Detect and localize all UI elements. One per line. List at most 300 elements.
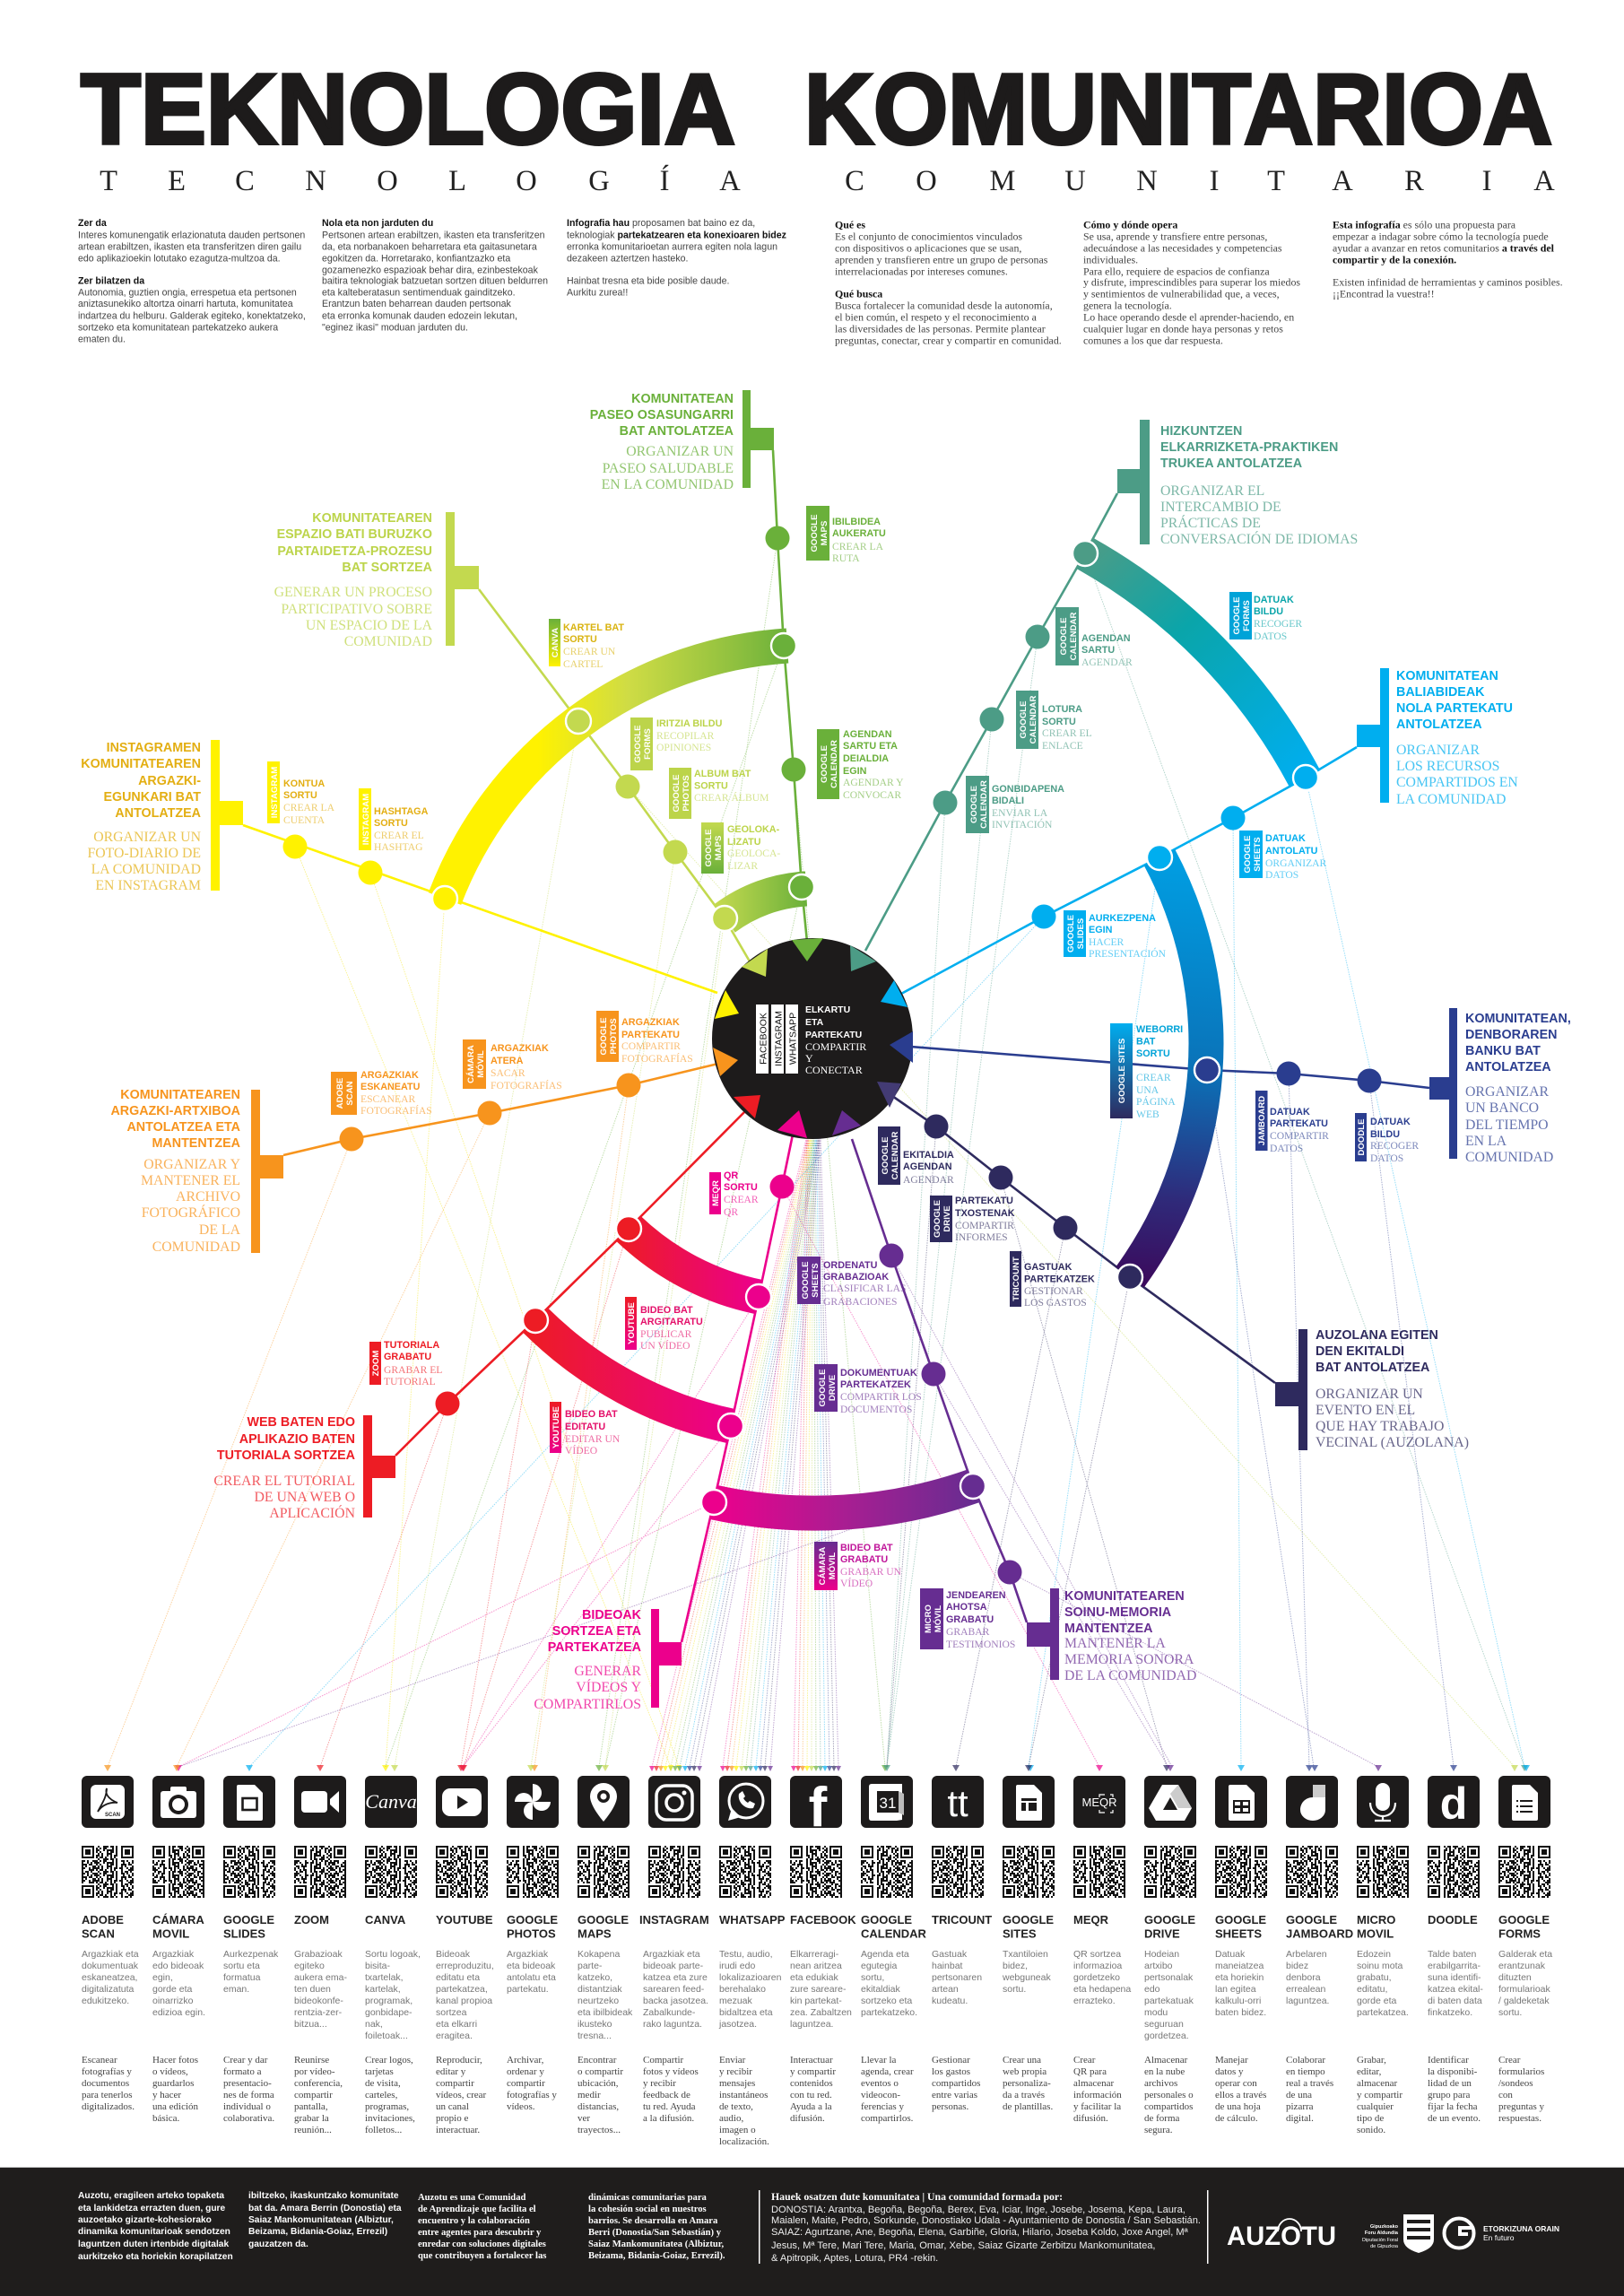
tool: Doodle: di baten data xyxy=(1428,1996,1482,2006)
node label: QR sortu: SORTU xyxy=(724,1182,758,1193)
tool: WhatsApp: berehalako xyxy=(719,1984,766,1995)
intro text: Nola eta non jarduten du: gozamenezko espazioak behar dira, ezinbestekoak xyxy=(322,265,539,276)
intro text: Qué es / Qué busca: preguntas, conectar, crear y compartir en comunidad. xyxy=(835,334,1062,346)
tool: Adobe Scan: dokumentuak xyxy=(82,1961,139,1971)
intro text: Qué es / Qué busca: Qué busca xyxy=(835,287,882,300)
node label: Bideo bat argitaratu xyxy=(625,1297,703,1352)
node label: Datuak partekatu xyxy=(1255,1091,1329,1154)
footer text: Spanish description: de Aprendizaje que facilita el xyxy=(418,2205,536,2214)
node label: Album bat sortu: SORTU xyxy=(694,780,728,791)
tool: WhatsApp: WHATSAPP xyxy=(719,1913,786,1926)
tool: Micro Movil: MICRO xyxy=(1357,1913,1395,1926)
tool: Google Maps: ubicación, xyxy=(578,2078,619,2089)
branch: dark indigo, auzolan event: DEN EKITALDI xyxy=(1316,1344,1404,1359)
node label: Agendan sartu eta deialdia egin: CONVOCAR xyxy=(843,789,901,801)
node label: Partekatu txostenak: DRIVE xyxy=(942,1205,952,1232)
intro text: Nola eta non jarduten du: Nola eta non jarduten du xyxy=(322,218,433,229)
branch: green, healthy walk: ORGANIZAR UN xyxy=(626,444,734,459)
tool: Micro Movil: Edozein xyxy=(1357,1949,1391,1960)
node label: Ordenatu grabazioak xyxy=(797,1257,906,1308)
node label: Bideo bat editatu xyxy=(550,1402,621,1457)
subtitle: TECNOLOGÍACOMUNITARIA xyxy=(100,165,1555,197)
node label: Jendearen ahotsa grabatu: MICRO xyxy=(924,1604,934,1633)
branch: yellow, Instagram photo diary: FOTO-DIARIO DE xyxy=(87,846,201,861)
tool: Google Forms: GOOGLE xyxy=(1498,1913,1550,1926)
branch: yellow, Instagram photo diary: ANTOLATZEA xyxy=(115,806,201,821)
branch: red, web tutorial: WEB BATEN EDO xyxy=(248,1415,355,1430)
logo: Etorkizuna Orain: ETORKIZUNA ORAIN xyxy=(1483,2224,1559,2233)
node label: Dokumentuak partekatzek: GOOGLE xyxy=(818,1369,828,1407)
branch: dark indigo, auzolan event: VECINAL (AUZOLANA) xyxy=(1316,1435,1469,1450)
tool: Google Sites xyxy=(1002,1776,1055,2112)
branch: lime, participatory process: COMUNIDAD xyxy=(344,634,432,649)
tool: Cámara Movil: edo bideoak xyxy=(152,1961,204,1971)
branch: red, web tutorial: CREAR EL TUTORIAL xyxy=(213,1474,355,1489)
node label: Datuak bildu: DATUAK xyxy=(1254,595,1294,605)
arc: lime to green small xyxy=(725,889,806,918)
intro text: Cómo y dónde opera xyxy=(1083,219,1300,346)
node label: Bideo bat grabatu: CÁMARA xyxy=(817,1547,828,1585)
footer text: Spanish description: Auzotu es una Comunidad xyxy=(418,2193,525,2203)
tool: Doodle: Identificar xyxy=(1428,2055,1469,2066)
central hub: ETA xyxy=(805,1017,824,1028)
node label: Album bat sortu: GOOGLE xyxy=(672,774,682,813)
tool: Tricount xyxy=(932,1776,992,2112)
tool: Canva: CANVA xyxy=(365,1913,406,1926)
tool: Adobe Scan xyxy=(82,1776,139,2112)
node label: Argazkiak atera xyxy=(463,1039,562,1091)
intro text: Esta infografía: empezar a indagar sobre cómo la tecnología puede xyxy=(1333,230,1549,242)
intro text: Nola eta non jarduten du: egokitzen da. Horretarako, konfiantzazko eta xyxy=(322,253,510,264)
node label: Datuak bildu: RECOGER xyxy=(1254,618,1302,630)
branch: blue, shared resources: ANTOLATZEA xyxy=(1396,718,1482,732)
tool: Zoom: bitzua... xyxy=(294,2019,327,2030)
tool: Canva: invitaciones, xyxy=(365,2113,415,2124)
tool: Google Maps xyxy=(578,1776,633,2135)
tool: Cámara Movil: MOVIL xyxy=(152,1927,189,1941)
node label: Datuak partekatu: COMPARTIR xyxy=(1270,1130,1329,1142)
branch: blue, shared resources: COMPARTIDOS EN xyxy=(1396,775,1518,790)
intro text: Esta infografía: ¡¡Encontrad la vuestra!! xyxy=(1333,287,1435,300)
footer text: community members: DONOSTIA: Arantxa, Begoña, Begoña, Berex, Eva, Iciar, Inge, Josebe, Josema, Kepa, Laura, xyxy=(771,2205,1185,2215)
branch: lime, participatory process: KOMUNITATEAREN xyxy=(312,511,432,526)
intro text: Zer da / Zer bilatzen da: ematen du. xyxy=(78,334,126,344)
tool: Google Calendar: 31 xyxy=(880,1795,896,1812)
intro text: Zer da / Zer bilatzen da: Zer bilatzen da xyxy=(78,276,144,287)
node label: Lotura sortu: CALENDAR xyxy=(1029,696,1038,744)
node label: Argazkiak atera: CÁMARA xyxy=(465,1045,476,1083)
branch: red, web tutorial: TUTORIALA SORTZEA xyxy=(217,1448,355,1463)
node label: Ordenatu grabazioak: ORDENATU xyxy=(823,1260,878,1271)
tool: Doodle: grupo para xyxy=(1428,2090,1470,2100)
node label: Ekitaldia agendan xyxy=(878,1126,954,1186)
tool: MEQR: información xyxy=(1073,2090,1122,2100)
branch: orange, photo archive: ARCHIVO xyxy=(176,1189,240,1205)
intro text: Nola eta non jarduten du: eta kalteberatasun sentimenduak gainditzeko. xyxy=(322,287,516,298)
tool: Adobe Scan: eskaneatzea, xyxy=(82,1972,137,1983)
tool: Canva: programak, xyxy=(365,1996,413,2006)
tool: Google Sheets: ellos a través xyxy=(1215,2090,1266,2100)
tool: Canva: foiletoak... xyxy=(365,2031,408,2041)
node label: Tutoriala grabatu: GRABATU xyxy=(384,1352,431,1362)
node label: Argazkiak eskaneatu: ESCANEAR xyxy=(360,1093,415,1105)
tool: Google Sites: da a través xyxy=(1003,2090,1045,2100)
branch: red, web tutorial: DE UNA WEB O xyxy=(255,1490,355,1505)
branch: blue, shared resources: NOLA PARTEKATU xyxy=(1396,701,1513,716)
tool: YouTube: propio e xyxy=(436,2113,468,2124)
intro text: Qué es / Qué busca: interrelacionadas por intereses comunes. xyxy=(835,265,1008,278)
tool: Google Jamboard: digital. xyxy=(1286,2113,1314,2124)
node label: Aurkezpena egin: GOOGLE xyxy=(1066,914,1076,952)
branch: navy, time bank: ANTOLATZEA xyxy=(1465,1060,1551,1074)
tool: Doodle: katzea ekital- xyxy=(1428,1984,1483,1995)
tool: Micro Movil: soinu mota xyxy=(1357,1961,1403,1971)
branch: dark indigo, auzolan event: ORGANIZAR UN xyxy=(1316,1387,1423,1402)
footer text: Spanish description: que contribuyen a fortalecer las xyxy=(418,2251,546,2261)
intro text: Qué es / Qué busca: Es el conjunto de conocimientos vinculados xyxy=(835,230,1022,242)
intro text: Zer da / Zer bilatzen da: sortzeko eta komunitatean partekatzeko aukera xyxy=(78,323,278,334)
tool: YouTube: YOUTUBE xyxy=(436,1913,493,1926)
node label: Lotura sortu xyxy=(1016,691,1092,752)
tool: Google Sheets: Manejar xyxy=(1215,2055,1248,2066)
intro text: Qué es / Qué busca xyxy=(835,219,1062,346)
footer text: community members: & Apitropik, Aptes, Lotura, PR4 -rekin. xyxy=(771,2253,938,2264)
tool: Facebook: FACEBOOK xyxy=(790,1913,856,1926)
tool: Canva: programas, xyxy=(365,2101,409,2112)
tool: Google Slides: colaborativa. xyxy=(223,2113,274,2124)
tool: Google Photos: compartir xyxy=(507,2078,545,2089)
node label: Datuak antolatu: DATUAK xyxy=(1265,833,1306,844)
node label: Argazkiak eskaneatu: SCAN xyxy=(345,1081,355,1106)
tool: Facebook: contenidos xyxy=(790,2078,833,2089)
tool: Cámara Movil: Argazkiak xyxy=(152,1949,194,1960)
tool: Canva: Crear logos, xyxy=(365,2055,413,2066)
branch: lime, participatory process xyxy=(274,511,750,961)
tool: Micro Movil xyxy=(1357,1776,1409,2135)
node label: Geolokalizatu: LIZAR xyxy=(727,860,758,872)
tool: Cámara Movil: guardarlos xyxy=(152,2078,194,2089)
tool: WhatsApp xyxy=(718,1776,786,2147)
node label: Aurkezpena egin: SLIDES xyxy=(1076,918,1086,949)
branch: orange, photo archive xyxy=(110,1063,722,1255)
node label: Partekatu txostenak: COMPARTIR xyxy=(955,1220,1014,1231)
node label: Datuak bildu Doodle: DATUAK xyxy=(1370,1117,1411,1127)
tool: WhatsApp: localización. xyxy=(719,2136,769,2147)
tool: Doodle: de un evento. xyxy=(1428,2113,1481,2124)
node label: Datuak bildu Doodle: RECOGER xyxy=(1370,1140,1419,1152)
tool: Canva: nak, xyxy=(365,2019,383,2030)
node label: Lotura sortu: ENLACE xyxy=(1042,740,1083,752)
tool: Google Sites: Txantiloien xyxy=(1003,1949,1048,1960)
tool: MEQR: errazteko. xyxy=(1073,1996,1116,2006)
branch: navy, time bank: EN LA xyxy=(1465,1134,1507,1149)
node label: Argazkiak partekatu: FOTOGRAFÍAS xyxy=(621,1052,693,1065)
footer text: Spanish description: barrios. Se desarrolla en Amara xyxy=(588,2216,718,2226)
tool: Doodle: Talde baten xyxy=(1428,1949,1476,1960)
intro text: Infografia hau xyxy=(567,218,786,298)
tool: Google Sites: de plantillas. xyxy=(1003,2101,1053,2112)
node label: Aurkezpena egin: PRESENTACIÓN xyxy=(1089,947,1167,960)
node label: Iritzia bildu: GOOGLE xyxy=(633,725,643,763)
tool: Adobe Scan: Argazkiak eta xyxy=(82,1949,139,1960)
logo: Diputación Foral de Gipuzkoa: Gipuzkoako xyxy=(1370,2224,1399,2230)
tool: Micro Movil: tipo de xyxy=(1357,2113,1384,2124)
node label: Bideo bat argitaratu: ARGITARATU xyxy=(640,1317,703,1327)
tool: Google Sheets: de una hoja xyxy=(1215,2101,1261,2112)
tool: Google Maps: medir xyxy=(578,2090,601,2100)
branch: teal, language exchange: INTERCAMBIO DE xyxy=(1160,500,1281,515)
tool: Google Forms: dituzten xyxy=(1498,1972,1532,1983)
node label: Iritzia bildu: OPINIONES xyxy=(656,742,711,753)
tool: Zoom: compartir xyxy=(294,2090,333,2100)
footer text: community members: Jesus, Mª Tere, Mari Tere, Maria, Omar, Xebe, Saiaz Gizarte Zerbitzu Mankomunitatea, xyxy=(771,2240,1156,2251)
node label: Bideo bat grabatu: GRABATU xyxy=(840,1554,888,1565)
tool: Google Drive: modu xyxy=(1144,2007,1168,2018)
tool: Google Sites: GOOGLE xyxy=(1003,1913,1054,1926)
tool: Zoom: grabar la xyxy=(294,2113,329,2124)
node label: Datuak antolatu: SHEETS xyxy=(1253,837,1263,872)
footer text: Basque description: Saiaz Mankomunitatean (Albiztur, xyxy=(248,2215,394,2225)
tool: Google Photos: PHOTOS xyxy=(507,1927,556,1941)
node label: Bideo bat editatu: VÍDEO xyxy=(565,1444,597,1457)
central hub: CONECTAR xyxy=(805,1064,863,1076)
tool: Google Forms: FORMS xyxy=(1498,1927,1541,1941)
tool: Adobe Scan: digitalizados. xyxy=(82,2101,135,2112)
logo: Diputación Foral de Gipuzkoa: Diputación Foral xyxy=(1362,2238,1398,2243)
node label: Jendearen ahotsa grabatu: GRABAR xyxy=(946,1626,990,1638)
branch: green, healthy walk: PASEO OSASUNGARRI xyxy=(590,408,734,422)
node label: Agendan sartu: AGENDAN xyxy=(1081,633,1131,644)
logo: Etorkizuna Orain xyxy=(1444,2219,1559,2248)
node label: Geolokalizatu: LIZATU xyxy=(727,837,761,848)
node label: Ibilbidea aukeratu: IBILBIDEA xyxy=(832,517,881,527)
arc: magenta to purple xyxy=(714,1486,973,1513)
node label: Kartel bat sortu: SORTU xyxy=(563,634,597,645)
node label: Argazkiak eskaneatu: ARGAZKIAK xyxy=(360,1070,419,1081)
node label: Bideo bat editatu: BIDEO BAT xyxy=(565,1409,618,1420)
intro text: Zer da / Zer bilatzen da xyxy=(78,218,306,344)
arc: blue to indigo xyxy=(1130,857,1206,1277)
node label: Kartel bat sortu: KARTEL BAT xyxy=(563,622,624,633)
branch: purple, sound memory: KOMUNITATEAREN xyxy=(1064,1589,1185,1604)
tool: Tricount: los gastos xyxy=(932,2066,970,2077)
node label: Datuak partekatu: DATUAK xyxy=(1270,1107,1310,1118)
tool: Google Drive: Almacenar xyxy=(1144,2055,1187,2066)
intro text: Qué es / Qué busca: las diversidades de las personas. Permite plantear xyxy=(835,323,1046,335)
tool: Google Jamboard: bidez xyxy=(1286,1961,1308,1971)
branch: yellow, Instagram photo diary: ORGANIZAR UN xyxy=(93,830,202,845)
tool: Google Slides: sortu eta xyxy=(223,1961,260,1971)
intro text: Nola eta non jarduten du: baitira teknologiak batzuetan sortzen dituen beldurren xyxy=(322,276,548,287)
tool: Google Forms: formularios xyxy=(1498,2066,1544,2077)
tool: Adobe Scan: Escanear xyxy=(82,2055,117,2066)
node label: Weborri bat sortu: WEB xyxy=(1136,1109,1159,1120)
tool: Google Jamboard: errealean xyxy=(1286,1984,1326,1995)
tool: Google Photos: GOOGLE xyxy=(507,1913,558,1926)
tool: Instagram: Zabalkunde- xyxy=(643,2007,696,2018)
tool: Google Drive: edo xyxy=(1144,1984,1160,1995)
logo: Diputación Foral de Gipuzkoa: de Gipuzkoa xyxy=(1370,2244,1399,2249)
footer text: Spanish description: enredar con soluciones digitales xyxy=(418,2239,546,2249)
tool: Zoom: aukera ema- xyxy=(294,1972,347,1983)
intro text: Esta infografía xyxy=(1333,219,1563,300)
tool: Google Slides: eman. xyxy=(223,1984,249,1995)
branch: yellow, Instagram photo diary: KOMUNITATEAREN xyxy=(81,757,201,771)
intro text: Qué es / Qué busca: aprenden y transfieren entre un grupo de personas xyxy=(835,253,1048,265)
logo: Diputación Foral de Gipuzkoa xyxy=(1362,2214,1434,2253)
tool: Google Sites: bidez, xyxy=(1003,1961,1028,1971)
tool: Zoom xyxy=(294,1776,347,2135)
node label: QR sortu: QR xyxy=(724,1170,738,1181)
tool: Canva xyxy=(365,1776,421,2135)
tool: Google Photos: Archivar, xyxy=(507,2055,543,2066)
node label: Album bat sortu: PHOTOS xyxy=(682,775,691,812)
intro text: Nola eta non jarduten du: eta erronka komunak dauden edozein lekutan, xyxy=(322,310,517,321)
intro text: Infografia hau: dezakeen aztertzen hasteko. xyxy=(567,253,688,264)
intro text: Nola eta non jarduten du xyxy=(322,218,548,334)
tool: WhatsApp: mezuak xyxy=(719,1996,753,2006)
tool: Google Sites: sortu. xyxy=(1003,1984,1026,1995)
tool: Zoom: por vídeo- xyxy=(294,2066,335,2077)
tool: Google Drive: compartidos xyxy=(1144,2101,1193,2112)
tool: Google Sheets: lan egitea xyxy=(1215,1984,1256,1995)
tool: Google Drive: archivos xyxy=(1144,2078,1177,2089)
tool: Tricount: artean xyxy=(932,1984,959,1995)
tool: Google Jamboard: denbora xyxy=(1286,1972,1321,1983)
node label: Aurkezpena egin: EGIN xyxy=(1089,925,1113,935)
tool: Zoom: ZOOM xyxy=(294,1913,329,1926)
node label: Gastuak partekatzek: PARTEKATZEK xyxy=(1024,1274,1095,1284)
node label: Geolokalizatu xyxy=(701,822,780,874)
tool: Google Slides xyxy=(223,1776,279,2124)
footer text: Basque description: Beizama, Bidania-Goiaz, Errezil) xyxy=(248,2227,387,2237)
intro text: Nola eta non jarduten du: da, eta norbanakoen beharretara eta gaitasunetara xyxy=(322,242,537,253)
node label: Dokumentuak partekatzek: COMPARTIR LOS xyxy=(840,1391,922,1403)
tool: YouTube xyxy=(436,1776,494,2135)
tool: MEQR: gordetzeko xyxy=(1073,1972,1120,1983)
node label: Dokumentuak partekatzek: DOCUMENTOS xyxy=(840,1404,912,1415)
intro text: Cómo y dónde opera: Lo hace operando desde el aprender-haciendo, en xyxy=(1083,310,1294,323)
tool: Facebook: nean aritzea xyxy=(790,1961,842,1971)
tool: Google Drive: personales o xyxy=(1144,2090,1194,2100)
intro text: Zer da / Zer bilatzen da: Autonomia, guztien ongia, errespetua eta pertsonen xyxy=(78,287,297,298)
branch: navy, time bank: DEL TIEMPO xyxy=(1465,1118,1549,1133)
tool: MEQR: difusión. xyxy=(1073,2113,1108,2124)
footer text: Basque description: laguntzen duten irtenbide digitalak xyxy=(78,2239,229,2249)
tool: Google Photos: antolatu eta xyxy=(507,1972,556,1983)
tool: Google Sites: SITES xyxy=(1003,1927,1037,1941)
tool: Facebook: zea. Zabaltzen xyxy=(790,2007,852,2018)
tool: Instagram: y recibir xyxy=(643,2078,676,2089)
node label: Ordenatu grabazioak: GOOGLE xyxy=(801,1261,811,1300)
tool: Google Maps: ikusteko xyxy=(578,2019,612,2030)
branch: green, healthy walk: PASEO SALUDABLE xyxy=(603,461,734,476)
tool: Google Jamboard: pizarra xyxy=(1286,2101,1314,2112)
tool: Google Maps: Encontrar xyxy=(578,2055,616,2066)
tool: Google Sites: Crear una xyxy=(1003,2055,1041,2066)
tool: Cámara Movil: una edición xyxy=(152,2101,199,2112)
tool: Google Calendar: compartirlos. xyxy=(861,2113,914,2124)
tool: Google Maps: distantziak xyxy=(578,1984,622,1995)
tool: Tricount: TRICOUNT xyxy=(932,1913,992,1926)
node label: Iritzia bildu: RECOPILAR xyxy=(656,730,715,742)
tool: Google Sites: webguneak xyxy=(1002,1972,1051,1983)
tool: Canva: folletos... xyxy=(365,2125,402,2135)
footer text: Spanish description: encuentro y la colaboración xyxy=(418,2216,530,2226)
intro text: Esta infografía: Esta infografía es sólo una propuesta para xyxy=(1333,219,1516,231)
tool: Instagram: Compartir xyxy=(643,2055,684,2066)
branch: magenta, create videos: GENERAR xyxy=(574,1664,641,1679)
node label: Datuak partekatu: DATOS xyxy=(1270,1143,1303,1154)
node label: Ibilbidea aukeratu: CREAR LA xyxy=(832,541,884,552)
node label: Hashtaga sortu: CREAR EL xyxy=(374,830,424,841)
node label: Gastuak partekatzek: LOS GASTOS xyxy=(1024,1297,1087,1309)
tool: Zoom: rentzia-zer- xyxy=(294,2007,343,2018)
node label: Geolokalizatu: GOOGLE xyxy=(704,829,714,867)
tool: Zoom: Reunirse xyxy=(294,2055,329,2066)
tool: YouTube: editatu eta xyxy=(436,1972,480,1983)
node label: Gastuak partekatzek: GESTIONAR xyxy=(1024,1285,1083,1297)
tool: Google Maps: neurtzeko xyxy=(578,1996,619,2006)
branch: orange, photo archive: FOTOGRÁFICO xyxy=(142,1204,240,1221)
node label: Iritzia bildu xyxy=(630,718,723,770)
tool: Google Sheets: kalkulu-orri xyxy=(1215,1996,1261,2006)
node label: Datuak bildu: DATOS xyxy=(1254,631,1287,642)
tool: Google Calendar: eventos o xyxy=(861,2078,899,2089)
tool: Google Maps: katzeko, xyxy=(578,1972,612,1983)
node label: Partekatu txostenak xyxy=(930,1196,1015,1243)
node label: Gonbidapena bidali xyxy=(966,776,1064,833)
tool: Google Calendar: videocon- xyxy=(861,2090,900,2100)
tool: Google Calendar: egutegia xyxy=(861,1961,897,1971)
node label: Bideo bat grabatu: VÍDEO xyxy=(840,1577,873,1589)
tool: Micro Movil: cualquier xyxy=(1357,2101,1394,2112)
node label: Iritzia bildu: FORMS xyxy=(643,728,653,760)
node label: Argazkiak partekatu: PARTEKATU xyxy=(621,1030,680,1040)
tool: Tricount: Gastuak xyxy=(932,1949,967,1960)
tool: Facebook: difusión. xyxy=(790,2113,825,2124)
node label: Tutoriala grabatu xyxy=(369,1340,442,1387)
branch: navy, time bank: DENBORAREN xyxy=(1465,1028,1557,1042)
tool: Google Maps: trayectos... xyxy=(578,2125,621,2135)
node label: Bideo bat argitaratu: BIDEO BAT xyxy=(640,1305,693,1316)
node label: Dokumentuak partekatzek xyxy=(814,1364,922,1415)
branch: purple, sound memory: MEMORIA SONORA xyxy=(1064,1652,1194,1667)
node label: Datuak bildu: GOOGLE xyxy=(1232,596,1242,635)
tool: Cámara Movil: o vídeos, xyxy=(152,2066,188,2077)
tool: Canva: Sortu logoak, xyxy=(365,1949,421,1960)
node label: Agendan sartu eta deialdia egin: GOOGLE xyxy=(820,744,829,783)
node label: Bideo bat argitaratu: YOUTUBE xyxy=(627,1301,637,1344)
intro text: Cómo y dónde opera: Se usa, aprende y transfiere entre personas, xyxy=(1083,230,1267,242)
tool: MEQR: almacenar xyxy=(1073,2078,1115,2089)
tool: Google Maps: Kokapena xyxy=(578,1949,620,1960)
tool: Google Drive: artxibo xyxy=(1144,1961,1173,1971)
tool: Google Drive: segura. xyxy=(1144,2125,1173,2135)
tool: Micro Movil: editatu, xyxy=(1357,1984,1387,1995)
node label: Dokumentuak partekatzek: DRIVE xyxy=(828,1374,838,1401)
tool: Instagram: fotos y vídeos xyxy=(643,2066,699,2077)
tool: Doodle: la disponibi- xyxy=(1428,2066,1478,2077)
node label: Hashtaga sortu xyxy=(359,788,429,853)
branch: yellow, Instagram photo diary: ARGAZKI- xyxy=(138,774,201,788)
tool: Google Forms: sortu. xyxy=(1498,2007,1522,2018)
node label: Bideo bat editatu: YOUTUBE xyxy=(551,1405,561,1448)
tool: Cámara Movil: CÁMARA xyxy=(152,1913,204,1926)
tool: Google Maps: MAPS xyxy=(578,1927,612,1941)
branch: navy, time bank xyxy=(910,1008,1571,1165)
intro text: Cómo y dónde opera: comunes a los que dar respuesta. xyxy=(1083,334,1223,346)
